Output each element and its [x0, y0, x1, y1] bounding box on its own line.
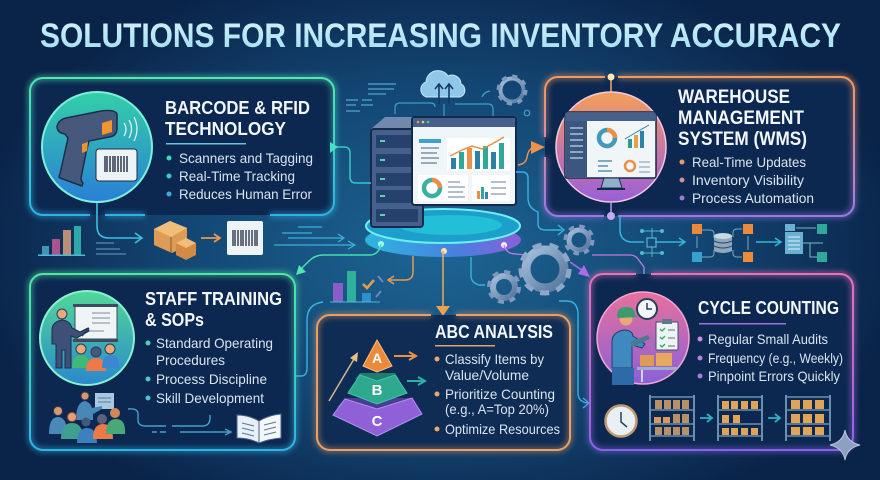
bullet list: Scanners and Tagging — [179, 150, 313, 166]
heading: SYSTEM (WMS) — [678, 129, 807, 150]
bullet list: Real-Time Tracking — [179, 168, 295, 184]
arrow: server to gears — [471, 257, 485, 285]
bullet list: Procedures — [156, 352, 225, 368]
bullet list: Regular Small Audits — [708, 331, 828, 347]
bullet list: Optimize Resources — [445, 421, 560, 437]
icon: gears cluster — [489, 226, 592, 302]
panel: barcode and RFID — [30, 78, 334, 215]
flow below barcode panel — [38, 203, 355, 260]
icon: small code lines — [346, 84, 396, 111]
icon: shelf full mixed — [650, 395, 694, 441]
icon: wall clock — [606, 406, 636, 436]
bullet list: Prioritize Counting — [445, 386, 555, 402]
connector bottom — [607, 203, 615, 220]
icon: trainer with presentation — [40, 291, 134, 385]
text lines — [96, 243, 126, 254]
icon: ABC pyramid: C — [372, 413, 383, 430]
panel: cycle counting — [590, 274, 853, 450]
icon: medium gear — [489, 272, 519, 302]
arrow: server to small gear — [516, 172, 564, 235]
bullet list: Standard Operating — [156, 335, 273, 351]
icon: dashboard screen — [412, 117, 516, 205]
heading — [145, 289, 282, 330]
bullet list: Value/Volume — [445, 367, 529, 383]
heading: MANAGEMENT — [678, 108, 804, 129]
bullet list: (e.g., A=Top 20%) — [445, 401, 549, 417]
icon: worker with clipboard — [597, 292, 689, 385]
bullet list: Real-Time Updates — [692, 154, 806, 170]
system flow below WMS — [620, 216, 827, 262]
icon: WMS monitor — [556, 92, 666, 202]
heading: CYCLE COUNTING — [698, 298, 839, 318]
icon: shelf complete — [786, 395, 830, 441]
bullet list: Reduces Human Error — [179, 186, 312, 202]
arrow: B level — [407, 377, 425, 385]
central server and dashboard — [346, 71, 530, 257]
icon: server rack — [371, 117, 423, 227]
panel: ABC analysis — [317, 315, 570, 450]
icon: sparkle — [830, 430, 860, 460]
bullet list: Skill Development — [156, 390, 264, 406]
icon: large gear — [521, 245, 569, 293]
arrow: boxes to barcode — [201, 234, 220, 242]
arrow: platform to cycle counting — [504, 245, 644, 291]
connector top — [608, 74, 614, 93]
bullet list: Process Discipline — [156, 371, 267, 387]
icon: cardboard boxes — [154, 221, 196, 260]
bullet list: Frequency (e.g., Weekly) — [708, 350, 843, 366]
arrow: platform to staff training — [296, 244, 381, 275]
icon: shelf partial — [718, 395, 762, 441]
icon: gear top — [482, 76, 530, 116]
platform disc — [365, 209, 521, 257]
icon: cloud — [395, 71, 493, 116]
icon: network node — [640, 228, 664, 257]
heading: BARCODE & RFID — [165, 98, 310, 118]
arrow: flow to book — [128, 409, 231, 435]
bullet list — [680, 154, 814, 206]
icon: open book — [237, 414, 281, 443]
bullet list: Inventory Visibility — [692, 172, 804, 188]
arrow: shelf 2 to 3 — [768, 414, 780, 422]
icon: ABC pyramid: A — [372, 350, 382, 366]
arrow: barcode to server — [330, 142, 371, 183]
connector dots — [378, 241, 507, 254]
mini chart above ABC — [330, 271, 383, 302]
icon: document tree — [785, 224, 827, 262]
heading — [165, 98, 310, 139]
arrow: platform to chart — [388, 256, 413, 284]
icon: barcode scanner — [42, 92, 152, 202]
bullet list — [698, 331, 843, 384]
heading: WAREHOUSE — [678, 87, 790, 108]
arrow: platform to ABC — [436, 251, 450, 316]
icon: ABC pyramid — [329, 340, 422, 436]
icon: database with nodes — [692, 224, 753, 262]
arrow: staff to ABC — [295, 302, 323, 376]
icon: team group — [49, 392, 125, 443]
heading: & SOPs — [145, 310, 204, 330]
arrow: A level — [394, 352, 416, 360]
arrow: ABC right to cycle counting — [559, 301, 589, 408]
bullet list: Process Automation — [692, 190, 814, 206]
bullet list: Pinpoint Errors Quickly — [708, 368, 840, 384]
arrows: data streams — [274, 227, 355, 249]
arrow: shelf 1 to 2 — [700, 414, 712, 422]
arrow: server to WMS — [518, 141, 545, 165]
bar chart — [38, 226, 85, 256]
icon: barcode tag — [227, 221, 263, 255]
icon: ABC pyramid: B — [372, 382, 383, 399]
bullet list — [434, 351, 560, 437]
arrow: scanner to boxes — [97, 203, 142, 243]
arrow: purple pointer — [570, 262, 590, 277]
bullet list — [166, 150, 313, 202]
panel: warehouse management system — [545, 74, 854, 220]
bullet list — [146, 335, 273, 406]
heading: ABC ANALYSIS — [435, 322, 553, 342]
heading: TECHNOLOGY — [165, 119, 286, 139]
heading: STAFF TRAINING — [145, 289, 282, 309]
heading — [678, 87, 807, 150]
icon: small gear — [566, 226, 592, 254]
panel: staff training and SOPs — [30, 274, 295, 450]
bullet list: Classify Items by — [445, 351, 544, 367]
